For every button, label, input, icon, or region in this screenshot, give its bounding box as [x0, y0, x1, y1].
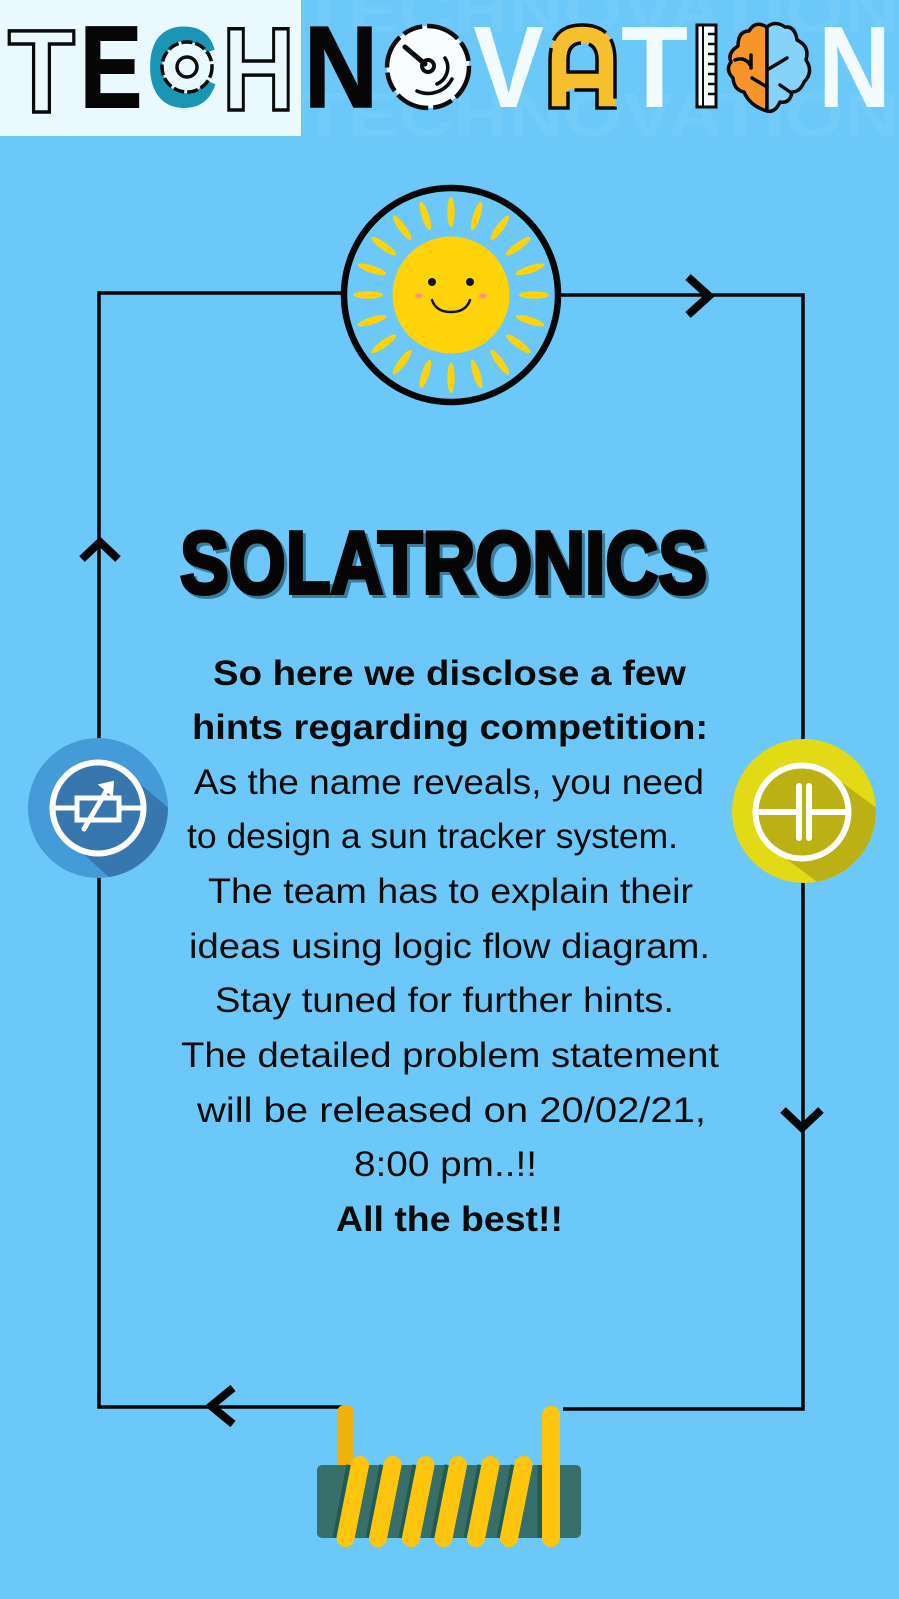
brain icon as O	[728, 24, 810, 111]
icon: inductor coil	[317, 1405, 581, 1538]
arrow: top right	[688, 277, 709, 315]
coil windings	[346, 1415, 551, 1538]
faint watermark wordmark	[301, 0, 899, 150]
body text: Stay tuned for further hints.	[215, 981, 674, 1020]
coil core	[317, 1465, 581, 1538]
letter E: E	[80, 2, 142, 132]
body text: All the best!!	[336, 1200, 563, 1239]
icon: smiling sun	[344, 188, 558, 402]
icon: capacitor	[732, 739, 878, 888]
body text: The detailed problem statement	[181, 1036, 719, 1075]
body text: will be released on 20/02/21,	[196, 1091, 706, 1130]
title: SOLATRONICS	[183, 516, 710, 615]
coil back post	[337, 1405, 354, 1465]
sun disc and face	[392, 236, 510, 354]
letter H outline: H	[222, 4, 295, 136]
letter T outline: T	[8, 6, 75, 138]
arrow: left up	[82, 542, 118, 559]
body text: hints regarding competition:	[192, 708, 708, 747]
ruler icon as I	[697, 25, 716, 107]
sun rays	[353, 197, 549, 393]
body text: 8:00 pm..!!	[354, 1145, 537, 1184]
letter N black: N	[304, 2, 378, 132]
header banner	[0, 0, 899, 150]
body text	[181, 654, 719, 1239]
white header block	[0, 0, 301, 136]
body text: ideas using logic flow diagram.	[189, 927, 710, 966]
letter C with gear: C	[147, 5, 217, 130]
letter V: V	[473, 2, 544, 132]
arrow: right down	[783, 1110, 821, 1128]
circuit wires	[99, 293, 803, 1409]
title: SOLATRONICS	[180, 513, 707, 612]
faint watermark wordmark: TECHNOVATION	[301, 81, 899, 150]
coil shadows	[336, 1465, 541, 1538]
gauge icon as O	[387, 26, 469, 108]
letter T white: T	[621, 2, 688, 132]
body text: to design a sun tracker system.	[187, 817, 678, 856]
letter A yellow: A	[582, 106, 583, 109]
arrow: bottom left	[211, 1388, 233, 1424]
icon: variable resistor	[28, 738, 172, 885]
body text: So here we disclose a few	[213, 654, 687, 693]
body text: As the name reveals, you need	[194, 763, 704, 802]
body text: The team has to explain their	[208, 872, 693, 911]
letter A yellow	[550, 25, 615, 109]
